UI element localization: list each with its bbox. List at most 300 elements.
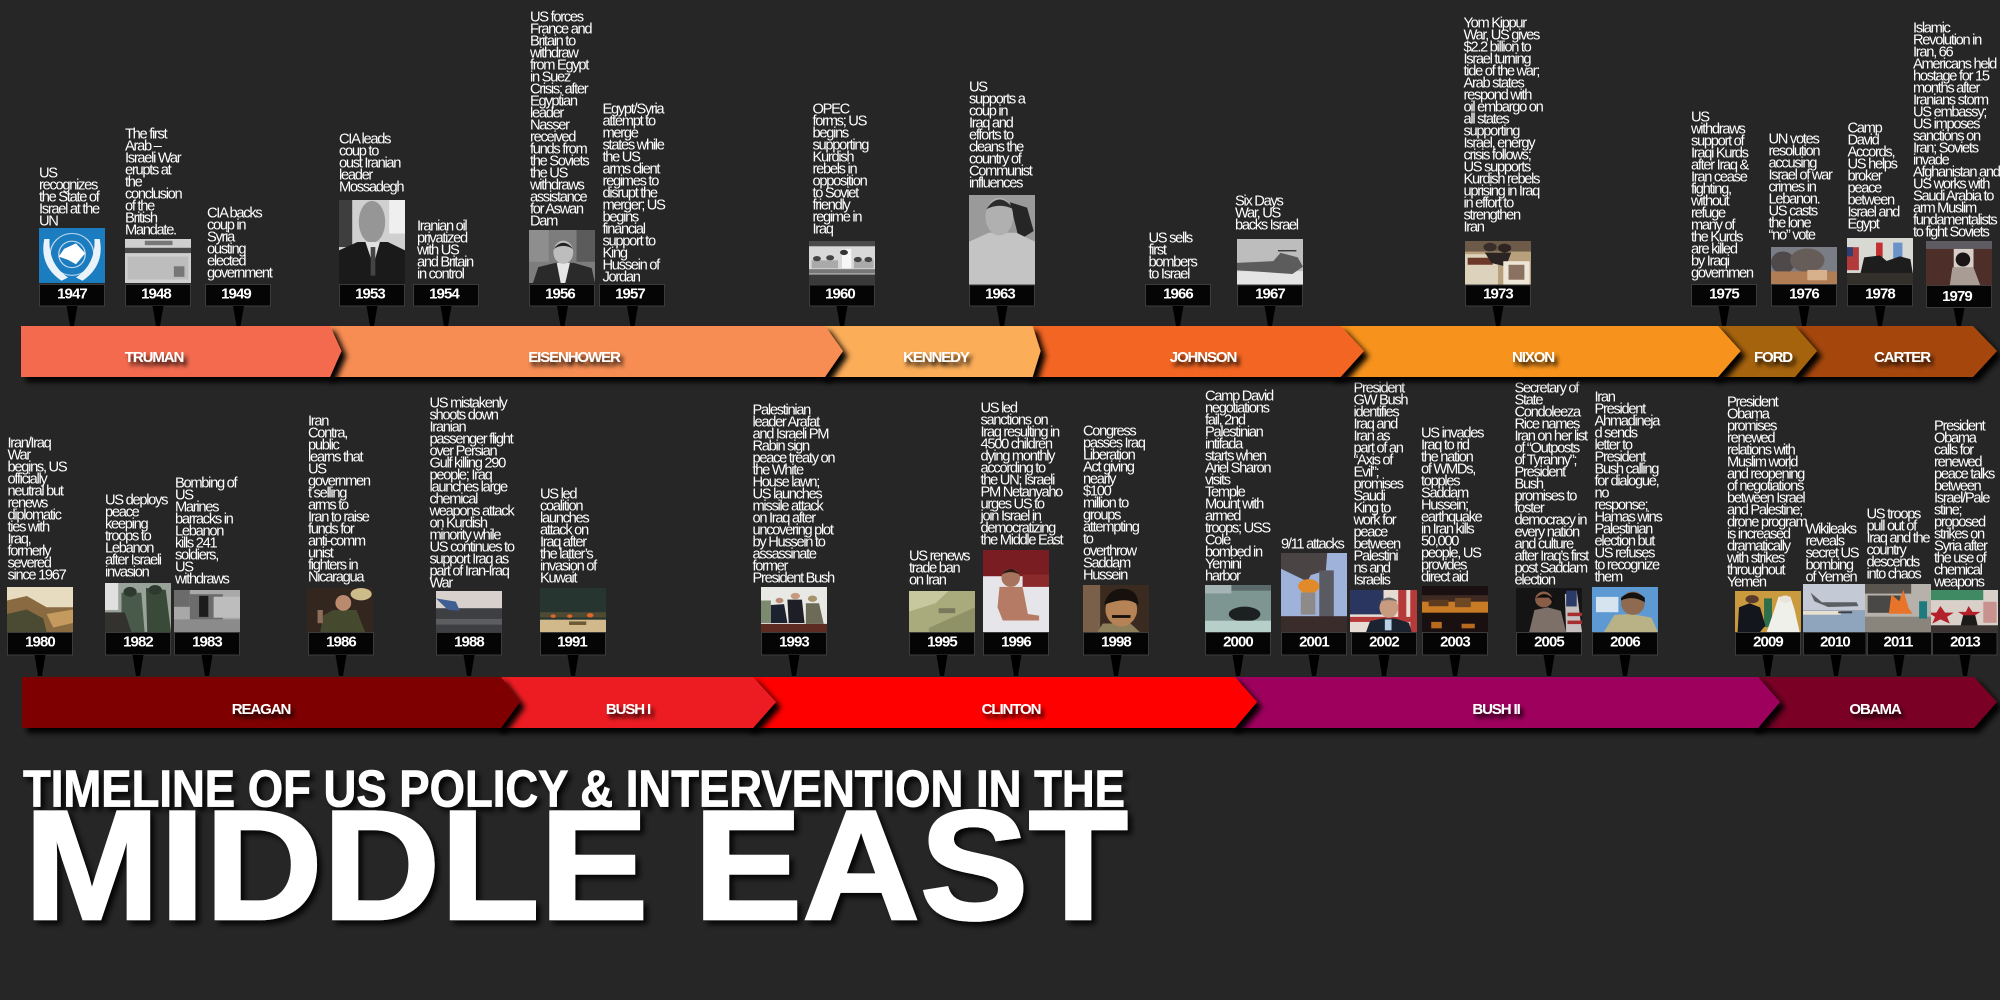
event text: over Persian (430, 443, 497, 459)
photo: Baghdad at night (1422, 586, 1488, 632)
event text: US (175, 488, 194, 504)
event text: into chaos (1866, 567, 1921, 583)
event text: uprising in Iraq (1464, 184, 1540, 200)
year box (340, 284, 404, 306)
year box (1352, 632, 1416, 655)
event text: weapons attack (428, 503, 515, 519)
event text: Dam (530, 214, 558, 230)
event text: foster (1514, 500, 1545, 516)
event text: King to (1354, 500, 1391, 516)
event text: and reopening (1727, 467, 1805, 483)
event text: according to (980, 460, 1046, 476)
event text: the lone (1768, 216, 1811, 232)
photo: map of Iran (909, 591, 975, 632)
event text: Lebanon (175, 524, 224, 540)
event text: US (39, 166, 58, 182)
event text: invasion (105, 565, 150, 581)
event text: invade (1913, 152, 1950, 168)
event text: in Iran kills (1421, 522, 1474, 538)
event text: people, US (1421, 546, 1482, 562)
event text: to Israel (1148, 267, 1190, 283)
event text: Act giving (1083, 460, 1135, 476)
event text: recognizes (39, 178, 98, 194)
pin (1960, 655, 1970, 676)
event text: leader Arafat (752, 415, 820, 431)
event text: the Middle East (980, 532, 1063, 548)
event text: President (1594, 401, 1646, 417)
event: 1995 (909, 549, 975, 676)
bottom timeline band: presidents 1980-2013 (22, 677, 1997, 728)
pin (557, 306, 568, 326)
year box: 1983 (192, 634, 222, 651)
event text: Saudi (1354, 488, 1386, 504)
photo: newspaper (125, 239, 191, 283)
pin (233, 306, 244, 326)
event text: unist (308, 546, 334, 562)
event text: shoots down (430, 407, 499, 423)
photo: USS Cole hull (1205, 585, 1271, 632)
year box: 2006 (1610, 634, 1640, 651)
event text: governmen (308, 474, 371, 490)
event text: regimes to (602, 174, 659, 190)
event text: coalition (540, 499, 583, 515)
event text: passes Iraq (1083, 436, 1146, 452)
event text: armed (1205, 509, 1241, 525)
label: Clinton: CLINTON (982, 701, 1041, 718)
event text: Ariel Sharon (1205, 461, 1271, 477)
event text: accusing (1768, 156, 1817, 172)
event: 1957 (600, 102, 666, 326)
event: 1996 (980, 400, 1063, 676)
event text: fighters in (308, 558, 359, 574)
event text: diplomatic (8, 508, 62, 524)
event text: Britain to (530, 34, 576, 50)
event text: fighting, (1691, 182, 1731, 198)
event text: attempting (1083, 520, 1140, 536)
event text: in effort to (1464, 196, 1514, 212)
event text: Yom Kippur (1464, 16, 1527, 32)
year box (810, 285, 874, 306)
year box: 1954 (429, 285, 460, 302)
year box (40, 284, 104, 306)
year box: 1963 (985, 285, 1015, 302)
event text: in control (417, 267, 465, 283)
event text: Secretary of (1514, 380, 1580, 396)
event text: kills 241 (175, 536, 217, 552)
top timeline band: presidents 1947-1979 (21, 326, 1997, 377)
event text: and Britain (417, 255, 474, 271)
photo: drone firing missile (1803, 584, 1865, 632)
event text: Syria (207, 230, 236, 246)
event text: promises (1354, 476, 1404, 492)
event text: conclusion (125, 187, 183, 203)
year box: 2005 (1534, 634, 1564, 651)
event text: Accords, (1848, 145, 1894, 161)
label: Ford: FORD (1754, 349, 1793, 366)
event text: Iraq resulting in (980, 424, 1060, 440)
year box (970, 285, 1034, 306)
event text: the State of (39, 190, 101, 206)
event: 1976 (1768, 132, 1837, 326)
event text: after Iraq & (1691, 158, 1750, 174)
event text: post Saddam (1514, 560, 1588, 576)
pin (34, 655, 46, 676)
photo: Oslo handshake (761, 587, 827, 632)
pin (1762, 655, 1774, 676)
event text: descends (1866, 555, 1920, 571)
event text: chemical (1934, 563, 1983, 579)
segment: Obama (1750, 677, 1997, 728)
label: Bush II: BUSH II (1472, 701, 1521, 718)
year box: 1949 (221, 285, 251, 302)
year box (1466, 285, 1530, 306)
event text: support Iraq as (430, 551, 509, 567)
year box: 1991 (557, 634, 587, 651)
event text: Israel and (1848, 205, 1900, 221)
event text: uncovering plot (752, 523, 834, 539)
event text: renewed (1934, 455, 1982, 471)
event text: of WMDs, (1421, 462, 1475, 478)
event text: promises (1727, 419, 1777, 435)
event: 1979 (1913, 20, 2000, 326)
event text: disrupt the (602, 186, 658, 202)
event text: friendly (812, 198, 851, 214)
year box (1592, 632, 1658, 655)
year box: 1956 (545, 285, 575, 302)
event text: negotiations (1205, 401, 1270, 417)
event text: influences (969, 176, 1023, 192)
event text: neutral but (8, 484, 64, 500)
photo: Obama and Saudi king (1735, 591, 1801, 632)
event text: weapons (1933, 575, 1985, 591)
year box: 2002 (1369, 634, 1399, 651)
event: 2002 (1350, 380, 1417, 676)
event text: US invades (1421, 426, 1484, 442)
event text: on Kurdish (430, 515, 488, 531)
event text: Iranian oil (417, 219, 467, 235)
event text: War, US (1235, 206, 1282, 222)
event text: governmen (1691, 266, 1754, 282)
event text: Egypt/Syria (602, 102, 665, 118)
photo: burning car (1865, 584, 1931, 632)
event: 2011 (1865, 507, 1932, 676)
event text: nearly (1083, 472, 1117, 488)
event text: attack on (540, 523, 589, 539)
event text: PM Netanyaho (980, 484, 1063, 500)
label: Bush I: BUSH I (606, 701, 651, 718)
event text: funds from (530, 142, 587, 158)
event: 2000 (1205, 389, 1274, 676)
event text: country (1866, 543, 1908, 559)
event text: Temple (1205, 485, 1246, 501)
event text: response; (1594, 497, 1648, 513)
event text: US (969, 80, 988, 96)
segment: Kennedy (820, 326, 1041, 377)
event text: first (1148, 243, 1167, 259)
segment: Nixon (1330, 326, 1741, 377)
year box: 2003 (1440, 634, 1470, 651)
event text: chemical (430, 491, 478, 507)
event text: pull out of (1866, 519, 1918, 535)
event text: Palestinian (1205, 425, 1264, 441)
event text: arms client (602, 162, 660, 178)
event text: OPEC (812, 102, 851, 118)
pin (1718, 306, 1730, 326)
event text: Jordan (602, 270, 641, 286)
event text: Obama (1727, 407, 1771, 423)
event text: received (530, 130, 576, 146)
event text: Arab states (1464, 76, 1524, 92)
event text: reveals (1806, 533, 1845, 549)
event text: US forces (530, 10, 584, 26)
event text: coup in (969, 104, 1008, 120)
event text: Iranians storm (1913, 92, 1989, 108)
event text: from Egypt (530, 58, 589, 74)
event text: Iraq (812, 222, 834, 238)
photo: Oliver North testifying (307, 588, 373, 632)
event text: arm Muslim (1913, 200, 1977, 216)
year box: 1953 (355, 285, 385, 302)
event text: is increased (1727, 527, 1791, 543)
event text: Iran/Iraq (8, 436, 52, 452)
event text: promises to (1514, 488, 1577, 504)
event text: withdraws (529, 178, 585, 194)
event text: million to (1083, 496, 1129, 512)
event text: oil embargo on (1464, 100, 1544, 116)
event text: merger; US (602, 198, 666, 214)
event text: Hussein; (1421, 498, 1468, 514)
title line 1: TIMELINE OF US POLICY & INTERVENTION IN THE (23, 760, 1125, 818)
event text: peace (105, 505, 140, 521)
event text: President (1594, 449, 1646, 465)
event text: support of (1691, 134, 1746, 150)
event text: democracy in (1514, 512, 1587, 528)
segment: Bush I (495, 677, 776, 728)
year box (106, 632, 170, 655)
event text: Egyptian (530, 94, 578, 110)
event text: Lebanon. (1768, 192, 1820, 208)
event text: Hamas wins (1594, 509, 1662, 525)
event text: Kurdish (812, 150, 854, 166)
year box: 2013 (1950, 634, 1980, 651)
event text: Wikileaks (1806, 521, 1857, 537)
event text: the US (602, 150, 641, 166)
event text: peace (1848, 181, 1882, 197)
event: 2010 (1803, 521, 1866, 676)
event text: oust Iranian (339, 155, 401, 171)
event text: US mistakenly (430, 395, 508, 411)
event text: Marines (175, 500, 219, 516)
year box (436, 632, 502, 655)
photo: US troops Lebanon (105, 583, 171, 632)
event text: War (430, 575, 453, 591)
event text: Afghanistan and (1913, 164, 2000, 180)
event text: topples (1421, 474, 1460, 490)
year box (1422, 632, 1488, 655)
event text: Syria after (1934, 539, 1988, 555)
event text: Iraq, (8, 532, 31, 548)
event text: Americans held (1913, 56, 1997, 72)
year box: 1947 (57, 285, 87, 302)
photo: sick child (983, 550, 1049, 632)
event text: Bush calling (1594, 461, 1659, 477)
event: 1973 (1464, 16, 1544, 326)
year box: 1973 (1483, 285, 1513, 302)
pin (1378, 655, 1390, 676)
event text: The first (125, 127, 168, 143)
event text: Kurdish rebels (1464, 172, 1540, 188)
event text: Iran as (1354, 428, 1390, 444)
pin (1798, 306, 1810, 326)
year box: 1966 (1163, 285, 1193, 302)
year box: 1993 (779, 634, 809, 651)
event text: keeping (105, 517, 148, 533)
photo: crowd with Khomeini poster (1926, 241, 1992, 285)
event text: earthquake (1421, 510, 1483, 526)
event text: groups (1083, 508, 1121, 524)
event text: US casts (1768, 204, 1818, 220)
event text: Iranian (430, 419, 466, 435)
event text: for dialogue, (1594, 473, 1659, 489)
event text: Hussein (1083, 568, 1128, 584)
event text: US sells (1148, 231, 1193, 247)
year box: 1975 (1709, 285, 1739, 302)
year box (600, 284, 664, 306)
event text: identifies (1354, 404, 1399, 420)
event text: between (1354, 536, 1401, 552)
pin (836, 306, 848, 326)
event text: broker (1848, 169, 1883, 185)
event text: peace (1354, 524, 1388, 540)
event text: War (8, 448, 31, 464)
photo: bombed barracks (174, 590, 240, 632)
event text: to recognize (1594, 557, 1660, 573)
event text: US (308, 462, 327, 478)
title (23, 760, 1128, 953)
event text: US imposes (1913, 116, 1980, 132)
event text: secret US (1806, 545, 1860, 561)
event text: visits (1205, 473, 1231, 489)
event text: launches large (430, 479, 508, 495)
event text: letter to (1594, 437, 1633, 453)
event text: throughout (1727, 563, 1785, 579)
event: 1998 (1083, 424, 1149, 676)
event text: President (1727, 395, 1779, 411)
pin (336, 655, 346, 676)
photo: Camp David handshake (1847, 238, 1913, 284)
event text: leader (530, 106, 564, 122)
event text: Camp (1848, 121, 1883, 137)
event text: are killed (1691, 242, 1738, 258)
event text: relations with (1727, 443, 1796, 459)
event text: fail, 2nd (1205, 413, 1246, 429)
year box (8, 632, 72, 655)
pin (464, 655, 474, 676)
year box: 1960 (825, 285, 855, 302)
event text: dramatically (1727, 539, 1792, 555)
year box (984, 632, 1048, 655)
event text: since 1967 (8, 568, 67, 584)
photo: Kuwait oil fires (540, 588, 606, 632)
event text: Palestinian (752, 403, 811, 419)
photo: UN emblem (39, 228, 105, 283)
segment: Eisenhower (325, 326, 843, 377)
label: Truman: TRUMAN (125, 349, 183, 366)
year box: 1948 (141, 285, 171, 302)
event text: France and (530, 22, 592, 38)
event text: the Kurds (1691, 230, 1743, 246)
year box: 1980 (25, 634, 55, 651)
year box (1516, 632, 1582, 655)
event text: CIA leads (339, 131, 391, 147)
event text: US led (980, 400, 1018, 416)
event: 1948 (125, 127, 191, 326)
photo: Ahmadinejad (1592, 587, 1658, 632)
event text: US continues to (430, 539, 515, 555)
event text: Iran (1594, 389, 1616, 405)
event text: Nasser (530, 118, 570, 134)
event text: with strikes (1726, 551, 1785, 567)
event text: Palestinian (1594, 521, 1653, 537)
event: 1953 (339, 131, 405, 326)
pin (1830, 655, 1842, 676)
event text: election but (1594, 533, 1655, 549)
event text: strikes on (1934, 527, 1985, 543)
event text: the nation (1421, 450, 1474, 466)
event text: “no” vote (1768, 228, 1816, 244)
event text: crisis follows; (1464, 148, 1531, 164)
photo: plane wreck (436, 591, 502, 632)
event text: part of Iran-Iraq (430, 563, 510, 579)
pin (152, 306, 164, 326)
event text: arms to (308, 498, 349, 514)
year box (308, 632, 374, 655)
event: 1978 (1847, 121, 1913, 326)
event: 1986 (307, 414, 374, 676)
event text: Iran on her list (1514, 428, 1588, 444)
event text: King (602, 246, 628, 262)
event text: British (125, 211, 158, 227)
event text: without (1690, 194, 1730, 210)
event text: coup in (207, 218, 246, 234)
event: 2005 (1514, 380, 1589, 676)
event: 1960 (809, 102, 875, 326)
event text: Condoleeza (1514, 404, 1582, 420)
event text: hostage for 15 (1913, 68, 1990, 84)
event text: David (1848, 133, 1880, 149)
event text: Iraq to rid (1421, 438, 1470, 454)
event text: bombed in (1205, 545, 1263, 561)
year box (762, 632, 826, 655)
event text: direct aid (1421, 570, 1469, 586)
event text: State (1514, 392, 1543, 408)
event text: CIA backs (207, 206, 262, 222)
event text: Iran cease (1691, 170, 1748, 186)
event text: Cole (1205, 533, 1231, 549)
event text: Rabin sign (752, 439, 810, 455)
event text: US launches (752, 487, 822, 503)
event text: Israel turning (1464, 52, 1531, 68)
event text: dying monthly (980, 448, 1056, 464)
photo: Mossadegh portrait (339, 200, 405, 284)
event text: Obama (1934, 431, 1978, 447)
event text: sanctions on (980, 412, 1048, 428)
label: Carter: CARTER (1874, 349, 1931, 366)
event text: the latter’s (540, 547, 593, 563)
event text: withdraws (174, 572, 230, 588)
event: 2009 (1726, 395, 1808, 676)
event text: by Hussein to (752, 535, 826, 551)
